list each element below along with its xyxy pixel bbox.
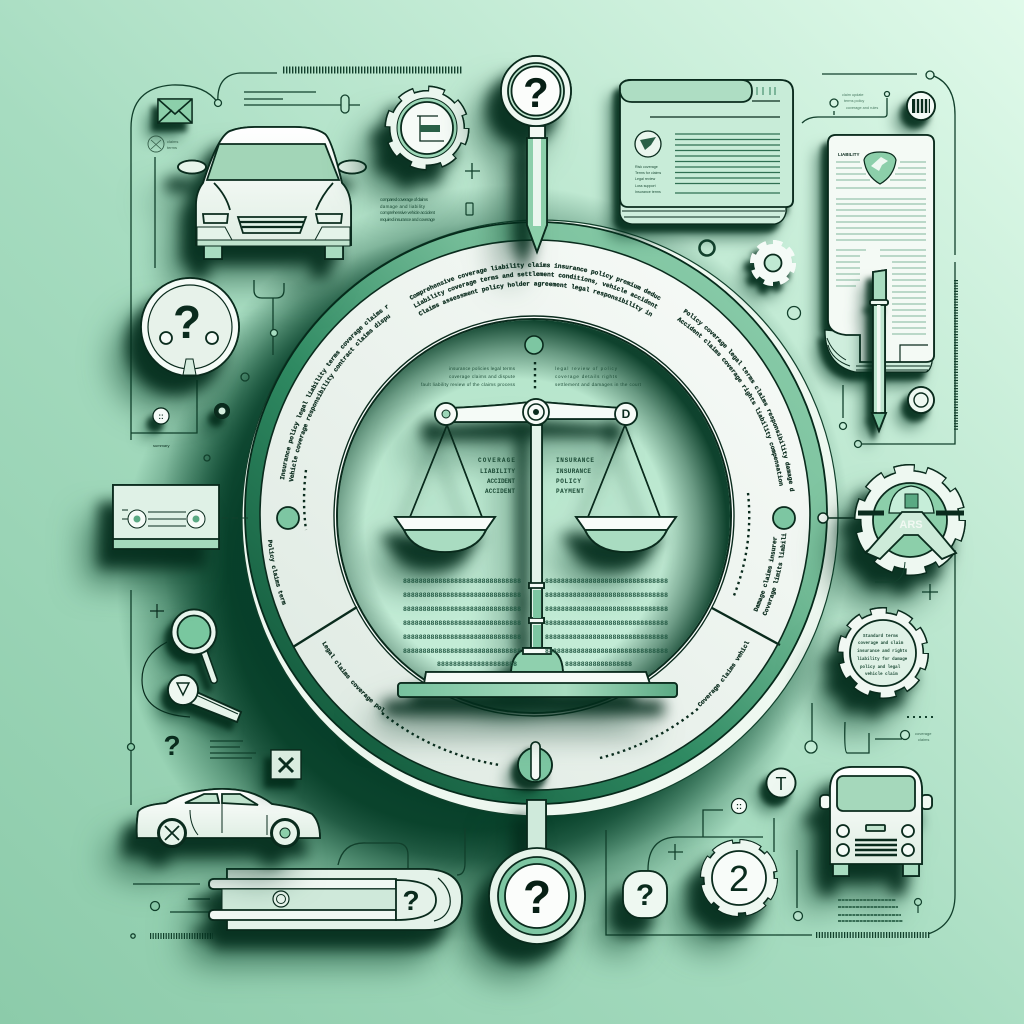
dial paragraph: 8888888888888888888888888888888: [545, 592, 668, 599]
dial paragraph: 88888888888888888888: [437, 661, 517, 668]
icon: question disc: [141, 278, 239, 376]
ring text: Coverage limits liability terms policy claims review: [762, 533, 786, 616]
icon: T badge: T: [776, 774, 786, 794]
bullet list: [635, 165, 661, 194]
icon: truck: [820, 767, 932, 876]
barcode: top: [283, 66, 462, 74]
bumper: [197, 227, 350, 240]
ring text: Policy coverage legal terms claims responsibility damage dispute insurer settlement vehicle agreement: [683, 308, 795, 492]
pen stem: [527, 138, 547, 252]
icon: car front: [178, 127, 366, 259]
ring text: Claims assessment policy holder agreement legal responsibility insurer damages traffic law coverage limits: [418, 281, 652, 317]
ring text: Coverage claims vehicle legal terms policy settlement: [698, 641, 750, 706]
scale side labels: COVERAGE: [478, 457, 515, 464]
small info lines top right: terms policy: [844, 99, 864, 103]
dial paragraph: 888888888888888888888888888888: [403, 634, 521, 641]
icon: key: [168, 675, 241, 722]
small info lines top right: claim update: [842, 93, 864, 97]
dial paragraph: 888888888888888888888888888888: [403, 592, 521, 599]
bullet list: Terms for claims: [635, 171, 661, 175]
ring text: Accident claims coverage rights liability compensation court policy drivers insurer legal damage terms: [676, 317, 783, 486]
icon: dotted coin: [153, 408, 169, 424]
grille: [238, 217, 306, 233]
dial paragraph: 8888888888888888888888888888888: [545, 648, 668, 655]
icon: question magnifier top with pen: ?: [523, 69, 549, 116]
barcode: bottom right: [816, 932, 930, 938]
dotted ring arcs: [304, 362, 749, 765]
white ring: [260, 240, 810, 790]
mini label left: summary: [153, 443, 169, 448]
main circle cast shadow: [117, 185, 850, 943]
icon: text gear: insurance and rights: [857, 649, 908, 654]
dial paragraph: 8888888888888888888888888888888: [545, 578, 668, 585]
doors: [190, 803, 267, 835]
sheet stack: [825, 330, 932, 372]
dial paragraph: 88888888888888888: [565, 661, 632, 668]
truck window: [837, 776, 915, 811]
barcode: bottom left: [150, 933, 213, 939]
dial text: settlement and damages in the court: [555, 382, 642, 387]
mini label near bracket: [915, 731, 932, 742]
scale side labels: INSURANCE: [556, 468, 591, 475]
icon: sedan: [137, 789, 320, 846]
shield: [864, 152, 896, 184]
emblem: [889, 486, 934, 513]
ring text: Vehicle coverage responsibility contract claims dispute legal terms compensation insurer rights agreement: [288, 314, 390, 482]
icon: pin: [914, 898, 922, 913]
rear wheel: [158, 820, 186, 846]
dial paragraph: [403, 578, 668, 668]
bullet list: Legal review: [635, 177, 656, 181]
icon: envelope: [158, 99, 192, 123]
scale strings: [410, 425, 660, 517]
connector to right gear: [828, 517, 860, 519]
mini text near car: required insurance and coverage: [380, 217, 435, 222]
ring side dots: [277, 507, 299, 529]
front wheel: [272, 820, 298, 846]
dial text: insurance policies legal terms: [449, 366, 516, 371]
mini label near bracket: claims: [918, 737, 929, 742]
dial paragraph: 888888888888888888888888888888: [403, 648, 521, 655]
icon: small gear: [754, 244, 792, 282]
dial paragraph: 888888888888888888888888888888: [403, 578, 521, 585]
dial paragraph: 8888888888888888888888888888888: [545, 606, 668, 613]
dial paragraph: 8888888888888888888888888888888: [545, 620, 668, 627]
icon: question magnifier top with pen: [501, 56, 571, 252]
mini label near bracket: coverage: [915, 731, 932, 736]
panel: policy document: [620, 80, 793, 224]
badge: [866, 825, 885, 831]
icon: square tile: [271, 750, 301, 779]
icon: magnifier: [172, 610, 216, 680]
slot bottom: [209, 910, 396, 920]
inner shadow: [338, 320, 730, 712]
mirrors: [178, 160, 206, 174]
icon: large gear with car emblem: ARS: [899, 519, 923, 531]
heading: LIABILITY: [838, 152, 860, 157]
icon: question magnifier bottom with stem: [489, 800, 585, 944]
icon: large gear with car emblem: [858, 470, 964, 570]
body: [196, 127, 351, 245]
icon: barcode badge: [907, 92, 935, 120]
scale base: [398, 648, 677, 697]
scale side labels: [478, 457, 594, 495]
seal: [635, 131, 661, 157]
ring text: Policy claims terms legal: [268, 540, 286, 606]
icon: text gear: liability for damage: [857, 657, 908, 662]
small seal with label: [148, 136, 178, 152]
icon: question disc: ?: [173, 296, 201, 348]
scale side labels: PAYMENT: [556, 488, 584, 495]
icon: text gear: vehicle claim: [865, 672, 898, 677]
sheet: [828, 135, 934, 362]
dotted marks: [907, 716, 936, 718]
dial text: [421, 366, 642, 387]
icon: question badge: ?: [636, 879, 654, 912]
scale side labels: LIABILITY: [480, 468, 515, 475]
icon: question badge: [623, 871, 667, 918]
frame lines: [128, 71, 955, 938]
pivots: [435, 399, 637, 425]
icon: gear with number 2: 2: [729, 858, 749, 899]
ring text: Damage claims insurer settlement legal rights vehicle: [753, 536, 777, 612]
dial paragraph: 888888888888888888888888888888: [403, 620, 521, 627]
small seal with label: claims: [167, 139, 178, 144]
headlights: [203, 214, 342, 223]
mini text near car: comprehensive vehicle accident: [380, 210, 436, 215]
truck wheels: [833, 860, 849, 876]
icon: question magnifier bottom with stem: ?: [523, 871, 551, 923]
balance scale: [395, 399, 677, 697]
wheels: [204, 243, 222, 259]
scale side labels: INSURANCE: [556, 457, 594, 464]
sheet: [620, 80, 793, 207]
bullet list: Loss support: [635, 184, 656, 188]
icon: top gear: [389, 90, 465, 166]
ring text: [268, 262, 795, 712]
truck grille: [855, 840, 897, 855]
ring text: Liability coverage terms and settlement conditions, vehicle accident claims legal rights insurer driver damage report: [413, 271, 658, 309]
icon: sliding bar with question mark: ?: [402, 885, 420, 916]
dial text: legal review of policy: [555, 366, 618, 371]
main circular panel: [242, 220, 854, 816]
question cap: [396, 880, 436, 920]
mini text near car: damage and liability: [380, 204, 426, 209]
icon: mini battery: [466, 203, 473, 215]
slot top: [209, 879, 396, 889]
headlights: [837, 825, 914, 856]
body rules: [836, 162, 926, 334]
lens: [501, 56, 571, 126]
small info lines top right: [842, 93, 878, 110]
ring text: Legal claims coverage policy insurer accident damages terms: [322, 641, 385, 712]
icon: text gear: Standard terms: [863, 634, 899, 639]
text lines under truck: [838, 900, 903, 921]
dial paragraph: 8888888888888888888888888888888: [545, 634, 668, 641]
mini label under gear: [875, 562, 905, 582]
left pan: [395, 517, 495, 552]
curled tab: [620, 80, 752, 102]
post: [531, 425, 542, 651]
mini text near car: [380, 197, 436, 222]
ring dividers: [293, 607, 780, 647]
dial text: fault liability review of the claims process: [421, 382, 516, 387]
panel: card: [113, 485, 219, 549]
icon: gear with number 2: [703, 842, 775, 914]
stacked sheets: [620, 200, 786, 224]
dial paragraph: 888888888888888888888888888888: [403, 606, 521, 613]
dial text: coverage claims and dispute: [449, 374, 515, 379]
icon: dotted button: ::: [736, 801, 742, 811]
small info lines top right: coverage and rules: [846, 106, 878, 110]
rules: [650, 101, 780, 117]
bullet list: Risk coverage: [635, 165, 658, 169]
icon: sparkle: [150, 604, 164, 618]
scale side labels: ACCIDENT: [487, 478, 515, 485]
icon: round badge right: [908, 387, 934, 413]
green band: [245, 222, 827, 804]
card connector: [222, 517, 250, 519]
icon: dark coin: [214, 403, 230, 419]
dial text: coverage details rights: [555, 374, 618, 379]
windows: [185, 794, 258, 805]
bullet list: Insurance terms: [635, 190, 661, 194]
icon: text gear: coverage and claim: [858, 641, 904, 646]
bottom knob: [518, 742, 552, 782]
icon: dotted coin: ::: [158, 412, 164, 421]
icon: dotted button: [732, 798, 746, 814]
ring text: Insurance policy legal liability terms coverage claims review premium accident damages settlement court: [280, 304, 388, 480]
small seal with label: terms: [167, 145, 177, 150]
mini text near car: compared coverage of claims: [380, 197, 429, 202]
scale side labels: POLICY: [556, 478, 581, 485]
cabin: [830, 767, 922, 864]
icon: pen: [870, 270, 888, 431]
outer white rim: [242, 220, 838, 816]
arc around key: [142, 642, 190, 717]
slot middle: [222, 889, 398, 910]
panel: contract document: [825, 135, 934, 372]
mirrors: [820, 795, 831, 809]
scale side labels: ACCIDENT: [485, 488, 515, 495]
windshield: [207, 144, 339, 180]
ring text: Comprehensive coverage liability claims insurance policy premium deductible coverage vehicle damage claims protection: [410, 262, 661, 300]
inner dial: [334, 316, 734, 716]
barcode: right: [954, 280, 958, 430]
beam: [450, 402, 622, 422]
question mark: ?: [163, 730, 181, 761]
icon: text gear: policy and legal: [860, 665, 901, 670]
icon: sliding bar with question mark: [209, 869, 462, 930]
icon: T badge: [766, 768, 796, 798]
icon: text gear: [842, 612, 924, 694]
right pan: [576, 517, 676, 552]
bar ring: [273, 891, 289, 907]
pivots: D: [622, 407, 631, 421]
